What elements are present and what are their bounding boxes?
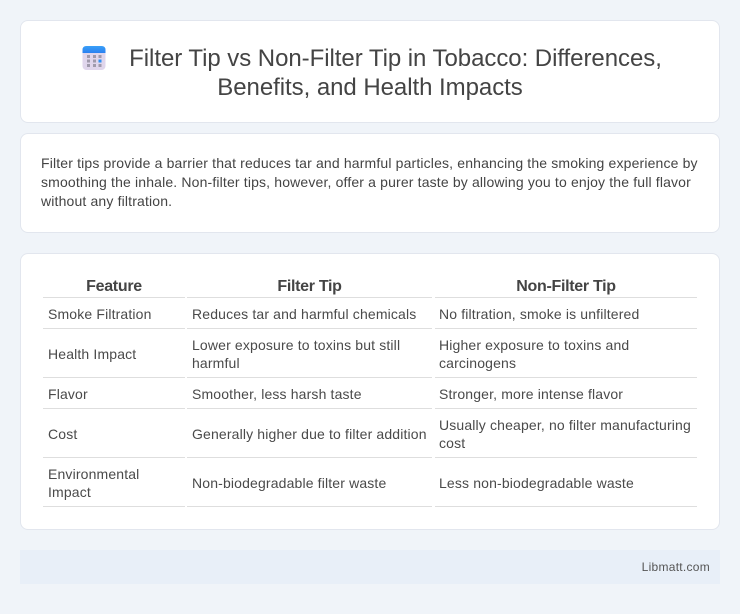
row: environmental impact: Impact — [48, 484, 91, 500]
table header row: Non-Filter Tip — [516, 278, 616, 295]
icon: calendar — [82, 46, 106, 70]
footer bar — [20, 550, 720, 584]
row: environmental impact — [48, 466, 634, 500]
row: health impact: harmful — [192, 355, 240, 371]
row: cost: cost — [439, 435, 465, 451]
comparison table — [43, 278, 697, 507]
table header row: Feature — [86, 278, 142, 295]
row: environmental impact: Less non-biodegradable waste — [439, 475, 634, 491]
row: health impact: Lower exposure to toxins but still — [192, 337, 400, 353]
row: health impact: Higher exposure to toxins and — [439, 337, 629, 353]
row: smoke filtration: No filtration, smoke is unfiltered — [439, 306, 639, 322]
row: cost: Generally higher due to filter addition — [192, 426, 427, 442]
row: cost: Cost — [48, 426, 77, 442]
footer source text: Libmatt.com — [642, 560, 710, 574]
text block: intro — [41, 155, 698, 209]
row: cost — [48, 417, 691, 451]
row: smoke filtration — [48, 306, 639, 322]
row: smoke filtration: Reduces tar and harmful chemicals — [192, 306, 416, 322]
panel: title card — [20, 20, 720, 123]
text block: intro: smoothing the inhale. Non-filter tips, however, offer a purer taste by allowing you to enjoy the full flavor — [41, 174, 691, 190]
row: health impact: Health Impact — [48, 346, 136, 362]
title: Benefits, and Health Impacts — [217, 74, 523, 101]
table header row: Filter Tip — [277, 278, 342, 295]
title — [129, 45, 662, 101]
row: cost: Usually cheaper, no filter manufacturing — [439, 417, 691, 433]
row: environmental impact: Environmental — [48, 466, 139, 482]
row: flavor: Flavor — [48, 386, 88, 402]
panel: comparison table card — [20, 253, 720, 530]
row: flavor: Stronger, more intense flavor — [439, 386, 623, 402]
row: smoke filtration: Smoke Filtration — [48, 306, 152, 322]
row: flavor — [48, 386, 623, 402]
row: environmental impact: Non-biodegradable filter waste — [192, 475, 386, 491]
panel: intro text card — [20, 133, 720, 233]
row: health impact — [48, 337, 629, 371]
text block: intro: Filter tips provide a barrier that reduces tar and harmful particles, enhancing the smoking experience by — [41, 155, 698, 171]
row: health impact: carcinogens — [439, 355, 516, 371]
title: Filter Tip vs Non-Filter Tip in Tobacco: Differences, — [129, 45, 662, 72]
table header row — [86, 278, 616, 295]
row: flavor: Smoother, less harsh taste — [192, 386, 362, 402]
text block: intro: without any filtration. — [41, 193, 172, 209]
